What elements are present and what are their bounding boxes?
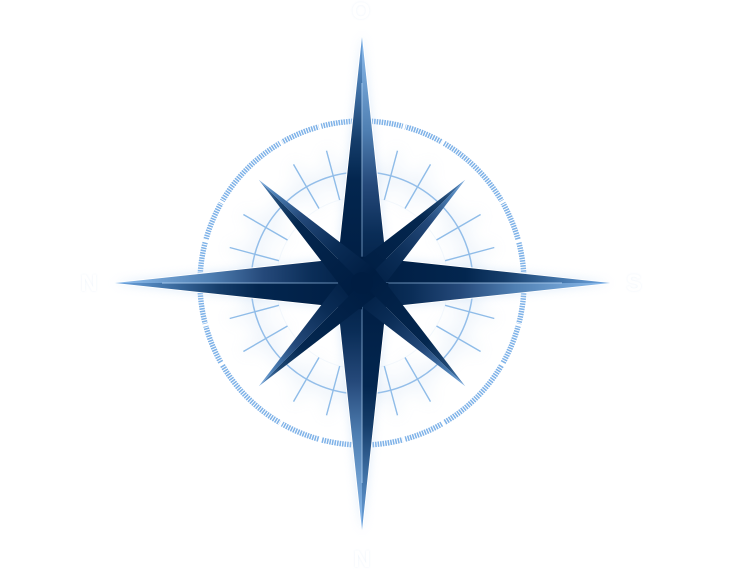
outer tick ring	[200, 121, 524, 445]
faint innermost ring	[276, 197, 448, 369]
dial glow	[230, 151, 494, 415]
star centre	[351, 272, 373, 294]
arm: north	[336, 37, 388, 283]
white star outline	[116, 37, 608, 529]
arm: south-east	[349, 270, 479, 400]
arm: north-west	[245, 166, 375, 296]
arm: south	[336, 283, 388, 530]
arm: west	[115, 257, 362, 309]
compass letter: left: N	[80, 270, 98, 297]
radial spokes	[230, 151, 494, 415]
compass letter: right: S	[626, 270, 642, 297]
compass letter: left: N	[80, 270, 98, 297]
compass star	[112, 33, 612, 533]
tick ring gaps	[202, 123, 522, 443]
arm: north-east	[349, 166, 479, 296]
inner ring	[251, 172, 473, 394]
dial: glow, rings and spokes	[200, 121, 524, 445]
arm: east	[362, 257, 610, 309]
arm: south-west	[245, 270, 375, 400]
compass letter: right: S	[626, 270, 642, 297]
star glow	[112, 33, 612, 533]
